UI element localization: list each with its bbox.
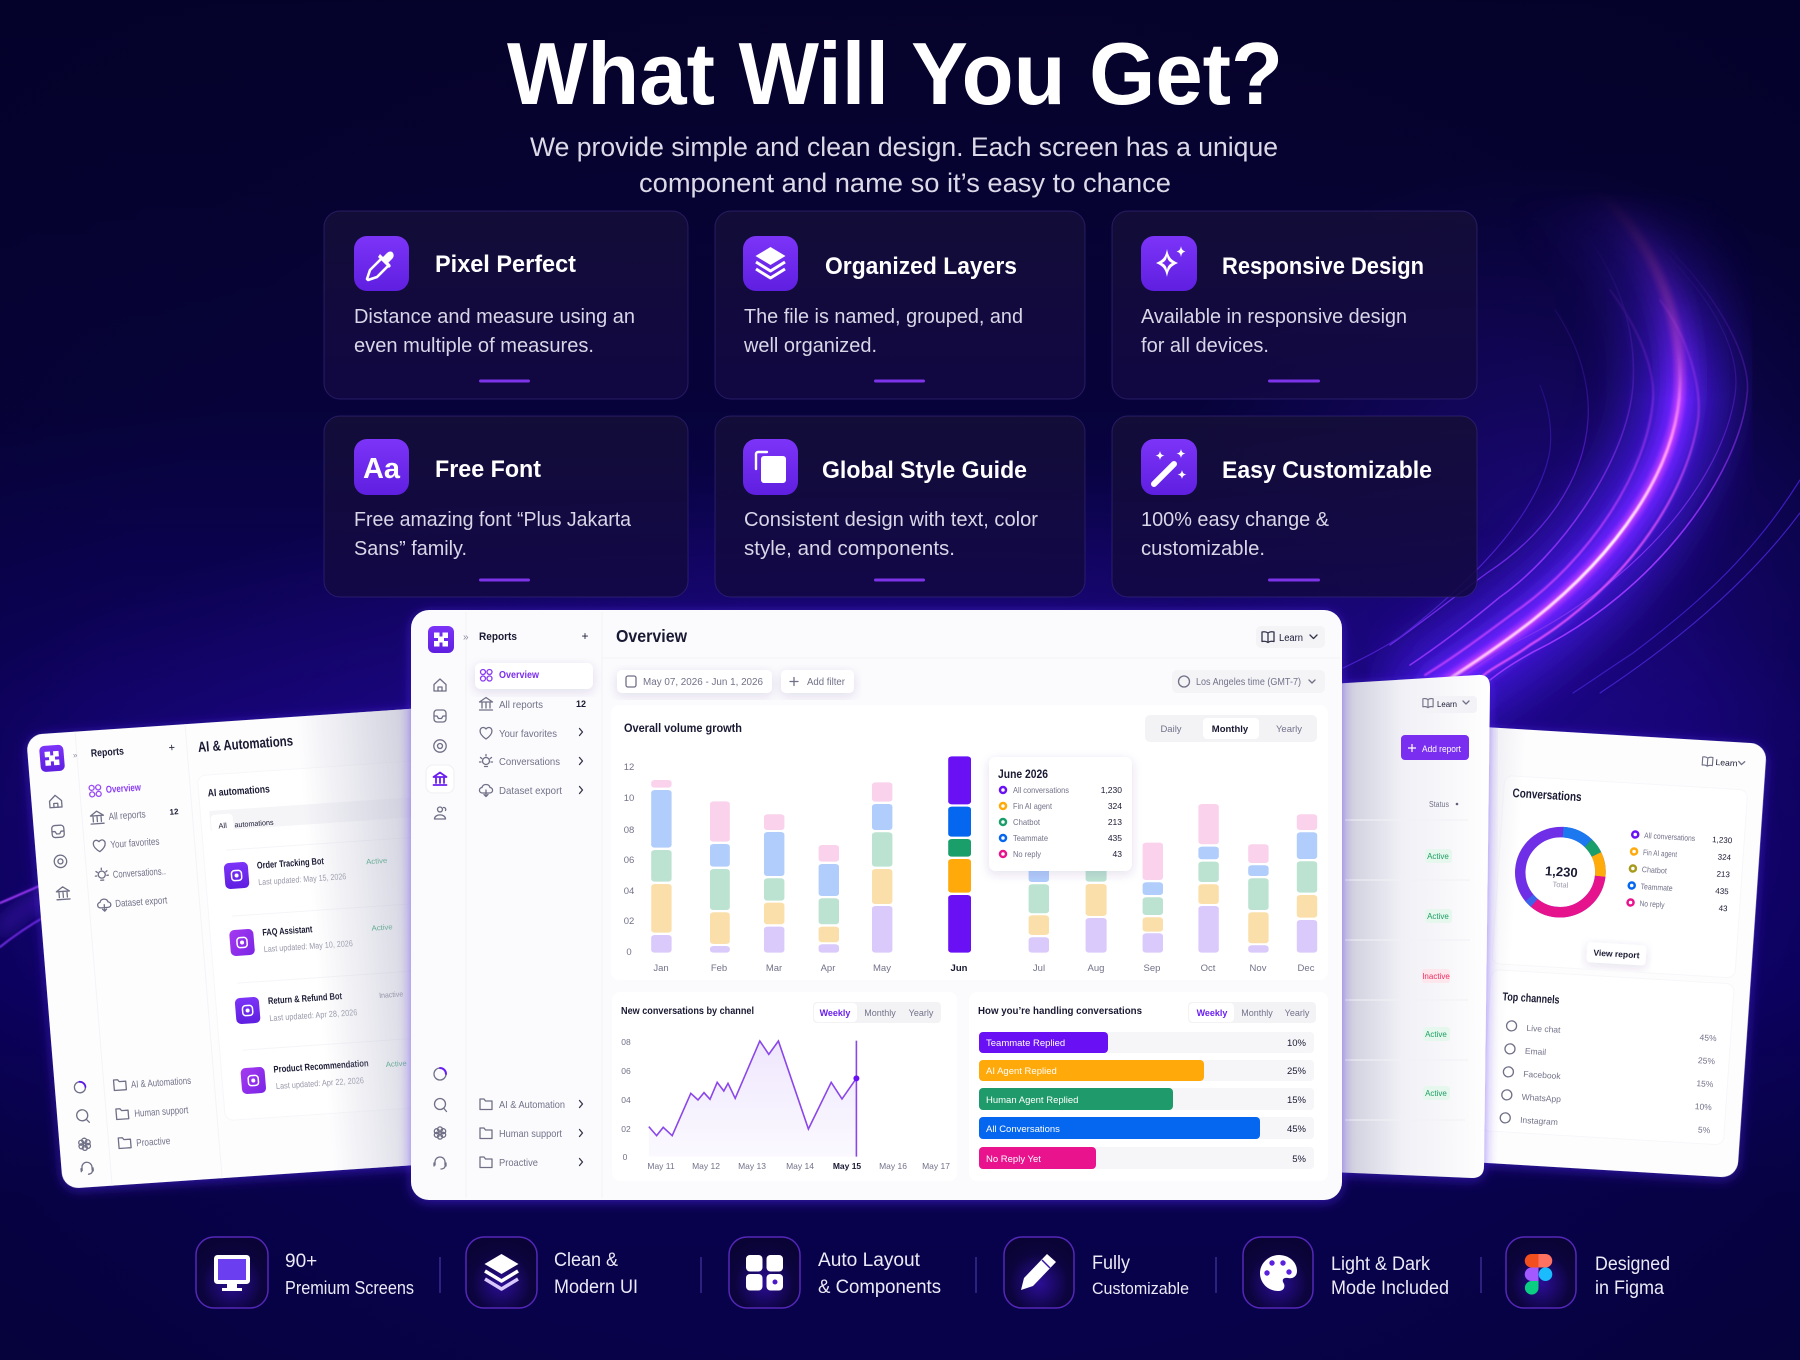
feature: auto layout and components: [729, 1237, 941, 1308]
segmented control: Monthly: [1241, 1008, 1273, 1018]
row: faq assistant: Active: [371, 922, 393, 933]
y axis labels: 0: [626, 947, 632, 958]
y axis labels: 08: [624, 825, 634, 836]
feature: designed in figma: Designed: [1595, 1254, 1670, 1275]
bars: [979, 1032, 1314, 1169]
y axis labels: 10: [624, 793, 634, 804]
feature: light and dark mode: [1243, 1237, 1449, 1308]
tooltip: june 2026: 435: [1108, 833, 1122, 843]
tooltip: june 2026: June 2026: [998, 769, 1048, 781]
bars: No Reply Yet: [986, 1154, 1041, 1165]
legend: 43: [1718, 904, 1728, 913]
legend: All conversations: [1644, 831, 1696, 843]
description: Free amazing font “Plus Jakarta: [354, 508, 632, 531]
status badges: Active: [1425, 1030, 1447, 1039]
divider: [1480, 1257, 1482, 1293]
status badges: Active: [1425, 1089, 1447, 1098]
x axis labels: May 13: [738, 1161, 766, 1171]
tooltip: june 2026: 1,230: [1101, 785, 1122, 795]
segmented control: Weekly: [820, 1008, 850, 1018]
description: customizable.: [1141, 537, 1265, 560]
date filter chips: May 07, 2026 - Jun 1, 2026: [643, 677, 763, 688]
panel: left ai automations screen: +: [168, 742, 176, 754]
divider: [700, 1257, 702, 1293]
panel: far right conversations screen: Learn: [1715, 757, 1738, 768]
card: top channels: Email: [1525, 1046, 1547, 1057]
feature: premium screens: Premium Screens: [285, 1278, 414, 1298]
y axis labels: [621, 1037, 631, 1162]
title: What Will You Get?: [507, 24, 1283, 123]
feature: fully customizable: Fully: [1092, 1253, 1130, 1274]
description: even multiple of measures.: [354, 334, 594, 357]
panel: organized layers: [715, 211, 1085, 399]
sidebar nav: Human support: [499, 1128, 562, 1140]
row: order tracking bot: Active: [366, 856, 388, 866]
learn button: Learn: [1279, 633, 1303, 644]
feature: auto layout and components: & Components: [818, 1277, 941, 1298]
sidebar rail icons: [426, 679, 454, 1169]
heading: responsive design: Responsive Design: [1222, 253, 1424, 280]
segmented control: Daily: [1160, 724, 1182, 735]
x axis labels: [647, 1161, 950, 1171]
row: product recommendation: Product Recommendation: [273, 1058, 369, 1076]
sidebar nav: Proactive: [499, 1157, 538, 1169]
tooltip: june 2026: 213: [1108, 817, 1122, 827]
sidebar nav: Dataset export: [499, 785, 562, 797]
card: top channels: 10%: [1694, 1101, 1713, 1112]
month labels: Jun: [951, 963, 968, 974]
y axis labels: 04: [624, 886, 634, 897]
bars: Teammate Replied: [986, 1038, 1065, 1049]
y axis labels: 06: [621, 1066, 631, 1076]
legend: Chatbot: [1642, 865, 1668, 876]
sidebar nav: [88, 780, 206, 1151]
chart: new conversations by channel: [612, 992, 957, 1181]
tooltip: june 2026: Chatbot: [1013, 817, 1041, 827]
sidebar nav: AI & Automations: [131, 1076, 191, 1091]
month labels: Jan: [653, 963, 669, 974]
icon: figma logo: [1506, 1237, 1576, 1308]
status badges: [1422, 849, 1452, 1100]
month labels: Jul: [1033, 963, 1045, 974]
description: well organized.: [743, 334, 877, 357]
panel: left ai automations screen: »: [73, 751, 78, 760]
card: automations list: All: [218, 821, 227, 830]
panel: middle right status screen: Learn: [1437, 699, 1457, 709]
heading: ai and automations: AI & Automations: [197, 734, 294, 756]
row: product recommendation: [240, 1056, 408, 1094]
panel: global style guide: [715, 416, 1085, 597]
legend: 1,230: [1712, 835, 1733, 845]
card: conversations donut: Conversations: [1512, 786, 1582, 804]
description: Consistent design with text, color: [744, 508, 1038, 531]
x axis labels: May 12: [692, 1161, 720, 1171]
feature: premium screens: 90+: [285, 1251, 317, 1272]
sidebar nav: All reports: [499, 699, 543, 711]
tooltip: june 2026: 324: [1108, 801, 1122, 811]
feature: fully customizable: Customizable: [1092, 1279, 1189, 1298]
divider: [975, 1257, 977, 1293]
sidebar nav: [475, 663, 593, 1169]
sidebar nav: 12: [169, 807, 179, 817]
segmented control: Yearly: [909, 1008, 934, 1018]
sidebar nav: Your favorites: [110, 837, 160, 851]
description: [743, 305, 1023, 357]
legend: 435: [1715, 887, 1730, 896]
description: Available in responsive design: [1141, 305, 1407, 328]
icon: Aa: Aa: [363, 453, 401, 485]
y axis labels: 02: [621, 1124, 631, 1134]
subtitle: component and name so it’s easy to chance: [639, 168, 1171, 198]
segmented control: Monthly: [864, 1008, 896, 1018]
tooltip: june 2026: Teammate: [1013, 833, 1048, 843]
divider: [439, 1257, 441, 1293]
bars: 5%: [1292, 1154, 1307, 1165]
panel: middle right status screen: Status: [1429, 800, 1449, 809]
card: top channels: Instagram: [1520, 1115, 1558, 1127]
heading: global style guide: Global Style Guide: [822, 457, 1027, 484]
card: top channels: 5%: [1698, 1124, 1711, 1135]
month labels: Feb: [711, 963, 727, 974]
description: for all devices.: [1141, 334, 1269, 357]
bars: 10%: [1287, 1038, 1307, 1049]
feature: clean and modern ui: [466, 1237, 638, 1308]
subtitle: [530, 132, 1278, 198]
segmented control: Yearly: [1285, 1008, 1310, 1018]
subtitle: We provide simple and clean design. Each screen has a unique: [530, 132, 1278, 162]
bars: Human Agent Replied: [986, 1095, 1078, 1106]
description: [354, 305, 635, 357]
segmented control: Yearly: [1276, 724, 1302, 735]
bars: All Conversations: [986, 1124, 1060, 1135]
y axis labels: 08: [621, 1037, 631, 1047]
icon: palette: [1243, 1237, 1313, 1308]
icon: monitor: [196, 1237, 268, 1308]
y axis labels: 06: [624, 855, 634, 866]
logo: [39, 745, 65, 772]
legend: Fin AI agent: [1643, 848, 1678, 859]
chart: new conversations by channel: New conversations by channel: [621, 1005, 754, 1017]
heading: organized layers: Organized Layers: [825, 253, 1017, 280]
sidebar rail icons: [49, 795, 94, 1175]
description: The file is named, grouped, and: [744, 305, 1023, 328]
heading: overview: Overview: [616, 626, 687, 646]
x axis labels: May 11: [647, 1161, 675, 1171]
date filter chips: [617, 670, 1325, 693]
y axis labels: 04: [621, 1095, 631, 1105]
sidebar nav: Conversations: [499, 756, 560, 768]
row: faq assistant: FAQ Assistant: [262, 924, 313, 939]
learn button: [1256, 626, 1325, 648]
donut chart: [1518, 830, 1603, 915]
panel: main overview dashboard: +: [581, 629, 589, 643]
description: [354, 508, 632, 560]
panel: far right conversations screen: [1387, 723, 1767, 1178]
icon: eyedropper: [354, 236, 409, 291]
row: order tracking bot: Last updated: May 15, 2026: [258, 871, 347, 887]
date filter chips: Los Angeles time (GMT-7): [1196, 677, 1301, 688]
date filter chips: Add filter: [807, 677, 846, 688]
x axis labels: May 14: [786, 1161, 814, 1171]
heading: free font: Free Font: [435, 456, 541, 483]
bars: 45%: [1287, 1124, 1307, 1135]
stacked bars: [651, 756, 1317, 953]
tooltip: june 2026: No reply: [1013, 849, 1042, 859]
description: Distance and measure using an: [354, 305, 635, 328]
card: top channels: Live chat: [1526, 1023, 1561, 1035]
sidebar nav: Proactive: [136, 1136, 171, 1149]
feature: light and dark mode: Light & Dark: [1331, 1254, 1430, 1275]
panel: left ai automations screen: Reports: [90, 745, 124, 760]
row: faq assistant: Last updated: May 10, 2026: [263, 938, 353, 954]
month labels: Apr: [821, 963, 835, 974]
segmented control: [813, 1002, 941, 1023]
icon: component grid: [729, 1237, 800, 1308]
card: top channels: Facebook: [1523, 1069, 1562, 1081]
panel: main overview dashboard: Reports: [479, 631, 517, 643]
bars: AI Agent Replied: [986, 1066, 1057, 1077]
sidebar nav: Human support: [134, 1105, 189, 1120]
tooltip: june 2026: [989, 757, 1132, 871]
bars: 25%: [1287, 1066, 1307, 1077]
divider: [1215, 1257, 1217, 1293]
tooltip: june 2026: Fin AI agent: [1013, 801, 1053, 811]
chart: how you are handling conversations: How you’re handling conversations: [978, 1005, 1142, 1017]
bars: 15%: [1287, 1095, 1307, 1106]
legend: No reply: [1639, 899, 1665, 910]
row: return and refund bot: Last updated: Apr 28, 2026: [269, 1007, 358, 1023]
sidebar nav: All reports: [108, 809, 146, 823]
card: conversations donut: View report: [1593, 948, 1640, 960]
month labels: Oct: [1201, 963, 1216, 974]
month labels: Nov: [1250, 963, 1267, 974]
legend: 213: [1716, 870, 1731, 879]
panel: responsive design: [1112, 211, 1477, 399]
segmented control: [1145, 715, 1317, 742]
panel: main overview dashboard: [411, 610, 1342, 1200]
tooltip: june 2026: 43: [1113, 849, 1122, 859]
panel: free font: [324, 416, 688, 597]
card: automations list: automations: [234, 818, 274, 829]
card: top channels: [1480, 969, 1734, 1145]
chart: overall volume growth: Overall volume growth: [624, 721, 742, 735]
card: automations list: AI automations: [207, 783, 270, 800]
panel: middle right status screen: [1330, 675, 1490, 1178]
row: return and refund bot: Inactive: [379, 989, 403, 1000]
sidebar nav: Dataset export: [115, 895, 168, 910]
chart: overall volume growth: [611, 705, 1328, 980]
sidebar nav: Conversations..: [112, 866, 166, 881]
month labels: Sep: [1144, 963, 1160, 974]
panel: pixel perfect: [324, 211, 688, 399]
status badges: Inactive: [1422, 972, 1450, 981]
x axis labels: May 16: [879, 1161, 907, 1171]
y axis labels: 0: [623, 1152, 628, 1162]
chart: how you are handling conversations: [969, 992, 1328, 1181]
status badges: Active: [1427, 852, 1449, 861]
description: [1141, 305, 1407, 357]
description: Sans” family.: [354, 537, 467, 560]
card: top channels: 15%: [1696, 1078, 1714, 1089]
card: automations list: [197, 760, 458, 1121]
month labels: Aug: [1088, 963, 1104, 974]
logo: [428, 626, 454, 653]
feature: light and dark mode: Mode Included: [1331, 1278, 1449, 1299]
feature: clean and modern ui: Clean &: [554, 1250, 618, 1271]
card: conversations donut: [1492, 775, 1748, 978]
icon: magic wand: [1141, 439, 1197, 495]
icon: Aa: [354, 439, 409, 495]
month labels: [653, 963, 1315, 974]
feature: fully customizable: [1004, 1237, 1189, 1308]
panel: easy customizable: [1112, 416, 1477, 597]
icon: layers: [743, 236, 798, 291]
card: conversations donut: Total: [1552, 880, 1569, 890]
row: faq assistant: [229, 919, 394, 956]
icon: pencil: [1004, 1237, 1074, 1308]
feature: premium screens: [196, 1237, 414, 1308]
glowing light swoosh on the right: [1343, 188, 1800, 693]
feature: clean and modern ui: Modern UI: [554, 1277, 638, 1298]
row: order tracking bot: Order Tracking Bot: [256, 856, 325, 872]
line chart: [649, 1041, 859, 1157]
y axis labels: [624, 762, 634, 958]
sidebar nav: Overview: [105, 783, 142, 796]
row: order tracking bot: [223, 852, 389, 889]
card: top channels: 25%: [1698, 1055, 1716, 1066]
y axis labels: 02: [624, 916, 634, 927]
sidebar nav: Your favorites: [499, 728, 557, 740]
status badges: Active: [1427, 912, 1449, 921]
segmented control: Monthly: [1212, 724, 1249, 735]
button: add report: Add report: [1422, 744, 1461, 755]
heading: pixel perfect: Pixel Perfect: [435, 251, 576, 278]
month labels: Mar: [766, 963, 782, 974]
feature: auto layout and components: Auto Layout: [818, 1250, 921, 1271]
card: top channels: WhatsApp: [1521, 1092, 1561, 1104]
panel: main overview dashboard: »: [463, 632, 469, 643]
legend: 324: [1717, 853, 1732, 862]
sidebar nav: Overview: [499, 669, 540, 681]
x axis labels: May 17: [922, 1161, 950, 1171]
icon: sparkles: [1141, 236, 1197, 291]
row: return and refund bot: [235, 987, 405, 1025]
segmented control: [1188, 1002, 1316, 1023]
description: [744, 508, 1038, 560]
month labels: Dec: [1298, 963, 1315, 974]
card: conversations donut: 1,230: [1545, 863, 1578, 880]
row: product recommendation: Active: [385, 1059, 407, 1069]
sidebar nav: AI & Automation: [499, 1099, 565, 1111]
feature: designed in figma: [1506, 1237, 1670, 1308]
legend: [1627, 830, 1733, 913]
card: top channels: Top channels: [1502, 991, 1560, 1007]
row: product recommendation: Last updated: Apr 22, 2026: [275, 1075, 365, 1091]
panel: left ai automations screen: [26, 708, 463, 1189]
icon: layers: [466, 1237, 537, 1308]
description: [1141, 508, 1329, 560]
x axis labels: May 15: [833, 1161, 861, 1171]
description: 100% easy change &: [1141, 508, 1329, 531]
tooltip: june 2026: All conversations: [1013, 785, 1069, 795]
icon: copy squares: [743, 439, 798, 495]
row: return and refund bot: Return & Refund Bot: [268, 991, 343, 1007]
button: add report: [1401, 735, 1469, 760]
light streaks on the left: [0, 884, 46, 947]
description: style, and components.: [744, 537, 955, 560]
feature: designed in figma: in Figma: [1595, 1278, 1664, 1299]
heading: easy customizable: Easy Customizable: [1222, 457, 1432, 484]
card: top channels: 45%: [1699, 1032, 1717, 1043]
y axis labels: 12: [624, 762, 634, 773]
month labels: May: [873, 963, 891, 974]
sidebar nav: 12: [576, 699, 586, 709]
legend: Teammate: [1640, 882, 1673, 893]
segmented control: Weekly: [1197, 1008, 1227, 1018]
